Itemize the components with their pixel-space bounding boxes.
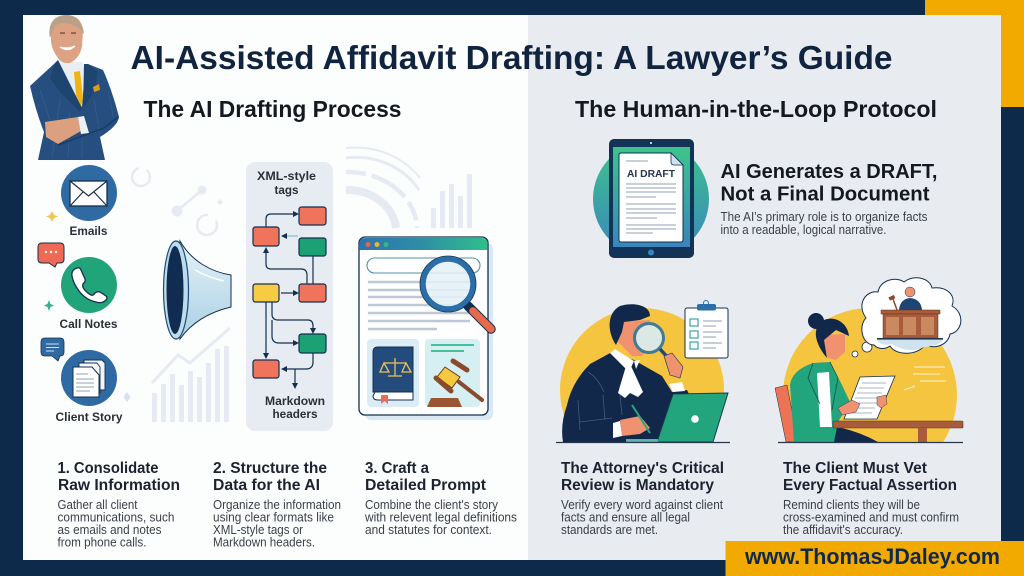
illustration: AI draft tablet	[593, 139, 709, 258]
icon: client story	[61, 350, 117, 406]
illustration: client vetting	[774, 277, 964, 442]
step 1 text	[58, 460, 180, 550]
left panel background	[23, 15, 528, 560]
title: AI-Assisted Affidavit Drafting: A Lawyer’s Guide	[130, 39, 892, 76]
client heading: The Client Must Vet	[783, 460, 927, 477]
website banner	[726, 541, 1024, 576]
icon: call notes	[61, 257, 117, 313]
step 2 heading line 2: Data for the AI	[213, 477, 320, 494]
panel: XML-style flowchart	[246, 162, 333, 431]
attorney body: Verify every word against client	[561, 498, 723, 512]
icon: gavel	[427, 345, 482, 407]
attorney body line 3: standards are met.	[561, 523, 658, 537]
icon: law book	[373, 347, 413, 404]
label: emails: Emails	[70, 224, 108, 238]
step 2 heading: 2. Structure the	[213, 460, 327, 477]
icon: teal sparkle	[44, 300, 54, 311]
step 1 body: Gather all client	[58, 498, 138, 512]
label: tags: tags	[274, 183, 299, 197]
portrait of man in blue suit	[30, 15, 119, 160]
text block: AI generates a draft	[720, 161, 938, 237]
step 3 body line 2: with relevent legal definitions	[364, 510, 517, 524]
client body: Remind clients they will be	[783, 498, 920, 512]
step 1 body line 3: as emails and notes	[58, 523, 162, 537]
flowchart boxes	[253, 207, 326, 378]
attorney heading line 2: Review is Mandatory	[561, 477, 714, 494]
step 2 text	[213, 460, 341, 550]
client heading line 2: Every Factual Assertion	[783, 477, 957, 494]
heading: the AI drafting process: The AI Drafting Process	[144, 96, 402, 122]
step 3 body line 3: and statutes for context.	[365, 523, 492, 537]
step 2 body line 3: XML-style tags or	[213, 523, 303, 537]
step 2 body: Organize the information	[213, 498, 341, 512]
client ground line	[778, 442, 963, 444]
thought bubble: courtroom	[862, 278, 961, 353]
decorative background graphics	[132, 147, 420, 383]
orange corner block	[925, 0, 1024, 107]
icon: emails	[61, 165, 117, 221]
right panel background	[528, 15, 1001, 560]
step 1 body line 4: from phone calls.	[58, 536, 146, 550]
icon: red chat bubble	[38, 243, 64, 267]
step 1 body line 2: communications, such	[58, 510, 175, 524]
callout heading: AI Generates a DRAFT,	[720, 161, 938, 183]
AI DRAFT label: AI DRAFT	[627, 168, 676, 180]
label: call notes: Call Notes	[60, 317, 118, 331]
label: Markdown: Markdown	[265, 394, 325, 408]
icon: checklist clipboard	[685, 300, 728, 358]
label: client story: Client Story	[56, 410, 123, 424]
icon: blue chat bubble	[41, 338, 64, 361]
icon: sparkle	[46, 211, 58, 222]
step 1 heading line 2: Raw Information	[58, 477, 180, 494]
step 3 text	[364, 460, 517, 537]
label: headers: headers	[272, 407, 318, 421]
step 2 body line 2: using clear formats like	[213, 510, 334, 524]
step 3 heading line 2: Detailed Prompt	[365, 477, 486, 494]
client body line 3: the affidavit's accuracy.	[783, 523, 903, 537]
callout body: The AI’s primary role is to organize facts	[720, 210, 928, 224]
label: XML-style tags: XML-style	[257, 169, 316, 183]
callout body line 2: into a readable, logical narrative.	[720, 223, 886, 237]
attorney body line 2: facts and ensure all legal	[561, 510, 690, 524]
client body line 2: cross-examined and must confirm	[783, 510, 959, 524]
icon: funnel	[164, 241, 231, 339]
illustration: browser prompt window	[359, 237, 493, 420]
website URL: www.ThomasJDaley.com	[744, 544, 1000, 569]
icon: magnifying glass	[420, 256, 491, 329]
icon: light diamond	[124, 392, 130, 402]
step 3 heading: 3. Craft a	[365, 460, 429, 477]
step 1 heading: 1. Consolidate	[58, 460, 159, 477]
attorney heading: The Attorney's Critical	[561, 460, 724, 477]
attorney ground line	[556, 442, 730, 444]
callout heading line 2: Not a Final Document	[720, 184, 930, 206]
flowchart connectors	[266, 214, 313, 385]
step 3 body: Combine the client's story	[365, 498, 499, 512]
illustration: attorney review	[560, 300, 729, 442]
heading: human-in-the-loop protocol: The Human-in-the-Loop Protocol	[575, 96, 937, 122]
flowchart arrowheads	[263, 211, 316, 389]
step 2 body line 4: Markdown headers.	[213, 536, 315, 550]
